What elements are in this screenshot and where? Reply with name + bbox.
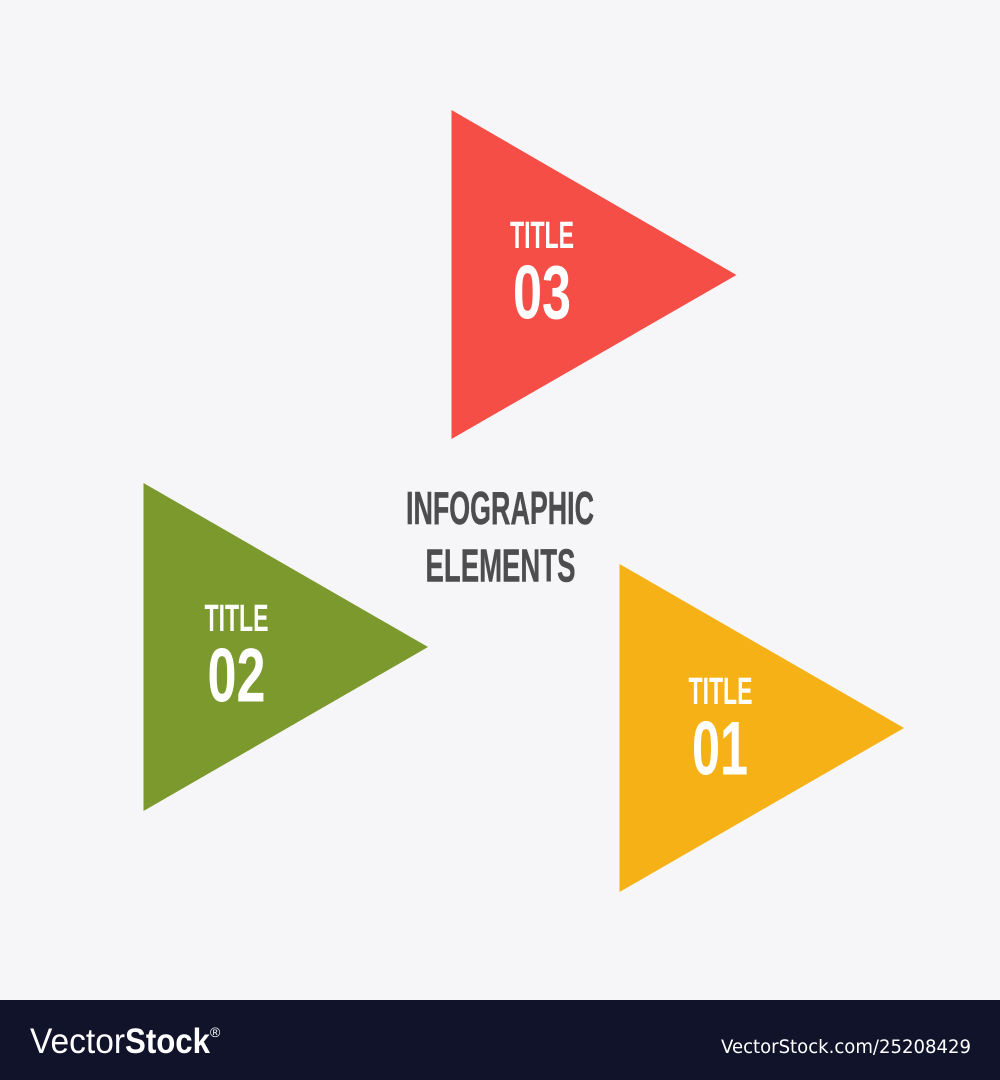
number 01: 01 — [692, 706, 748, 792]
triangle panel 01 — [620, 564, 904, 892]
watermark logo: VectorStock — [30, 1022, 210, 1061]
central heading — [406, 482, 594, 592]
triangle panel 03 — [452, 110, 736, 439]
central heading: INFOGRAPHIC — [406, 482, 594, 534]
watermark footer bar — [0, 1000, 1000, 1080]
title 03 label: TITLE — [510, 215, 574, 257]
number 02: 02 — [208, 634, 266, 718]
registered mark: ® — [210, 1024, 221, 1040]
triangle panel 02 — [144, 483, 428, 811]
title 02 label: TITLE — [204, 598, 268, 640]
title 01 label: TITLE — [688, 671, 752, 713]
watermark url: VectorStock.com/25208429 — [721, 1036, 971, 1058]
number 03: 03 — [513, 250, 571, 336]
central heading: ELEMENTS — [426, 540, 576, 592]
